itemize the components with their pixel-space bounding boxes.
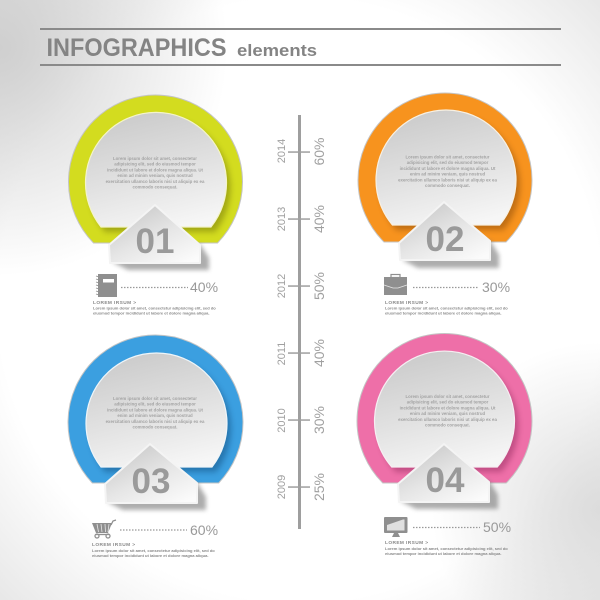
header <box>40 28 561 66</box>
disc text: Lorem ipsum dolor sit amet, consectetur <box>113 156 197 161</box>
caption: LOREM IRSUM > <box>385 540 428 546</box>
timeline: 2010 <box>276 408 288 433</box>
caption: LOREM IRSUM > <box>92 542 135 548</box>
icon: notebook <box>96 274 117 297</box>
disc text: enim ad minim veniam, quis nostrud <box>410 411 485 416</box>
disc text: incididunt ut labore et dolore magna aliqua. Ut <box>400 166 496 171</box>
caption <box>385 540 508 556</box>
disc text: exercitation ullamco laboris nisi ut aliquip ex ea <box>398 417 497 422</box>
timeline: 25% <box>311 473 327 501</box>
disc text: exercitation ullamco laboris nisi ut aliquip ex ea <box>106 419 205 424</box>
disc text: Lorem ipsum dolor sit amet, consectetur <box>406 154 490 160</box>
timeline: 2011 <box>276 342 288 365</box>
disc text: exercitation ullamco laboris nisi ut aliquip ex ea <box>398 177 497 182</box>
caption: Lorem ipsum dolor sit amet, consectetur adipisicing elit, sed do <box>93 306 216 310</box>
disc text <box>106 396 205 430</box>
subtitle: elements <box>237 41 317 60</box>
timeline <box>276 115 327 529</box>
disc text: adipisicing elit, sed do eiusmod tempor <box>407 160 489 165</box>
panel: 04 <box>357 333 532 556</box>
caption: eiusmod tempor incididunt ut labore et dolore magna aliqua. <box>385 551 501 556</box>
caption: Lorem ipsum dolor sit amet, consectetur adipisicing elit, sed do <box>385 306 508 310</box>
ring yellow-green <box>69 95 243 243</box>
progress row: 40% <box>190 279 218 295</box>
disc text: Lorem ipsum dolor sit amet, consectetur <box>113 396 197 401</box>
caption: eiusmod tempor incididunt ut labore et dolore magna aliqua. <box>385 310 501 316</box>
ring blue <box>68 335 243 483</box>
panel: 03 <box>68 335 243 558</box>
number tag <box>398 444 498 509</box>
timeline: 2012 <box>276 274 288 298</box>
inner disc <box>86 353 227 467</box>
disc text: adipisicing elit, sed do eiusmod tempor <box>114 402 196 407</box>
disc text: incididunt ut labore et dolore magna aliqua. Ut <box>400 405 496 410</box>
number tag: 02 <box>426 220 464 259</box>
timeline: 50% <box>311 272 327 300</box>
timeline: 60% <box>311 137 327 166</box>
caption: Lorem ipsum dolor sit amet, consectetur adipisicing elit, sed do <box>385 546 508 551</box>
caption: eiusmod tempor incididunt ut labore et dolore magna aliqua. <box>93 310 209 316</box>
icon: shopping cart <box>92 520 116 538</box>
disc text: adipisicing elit, sed do eiusmod tempor <box>114 162 196 167</box>
panel: 02 <box>358 93 532 316</box>
disc text: adipisicing elit, sed do eiusmod tempor <box>407 400 489 405</box>
number tag: 04 <box>426 461 465 500</box>
progress row: 30% <box>482 279 510 295</box>
icon: monitor <box>384 517 408 537</box>
caption <box>385 300 508 316</box>
disc text: commodo consequat. <box>425 183 470 188</box>
disc text <box>398 154 497 188</box>
timeline: 30% <box>311 406 327 434</box>
number tag <box>105 444 206 510</box>
number tag: 03 <box>132 462 170 501</box>
disc text: commodo consequat. <box>133 424 177 430</box>
inner disc <box>86 112 227 227</box>
progress row: 60% <box>190 522 218 538</box>
progress row <box>120 522 218 538</box>
disc text: incididunt ut labore et dolore magna aliqua. Ut <box>107 407 203 412</box>
disc text: enim ad minim veniam, quis nostrud <box>117 173 193 178</box>
number tag: 01 <box>136 222 174 261</box>
caption <box>92 542 215 558</box>
disc text: commodo consequat. <box>425 422 470 428</box>
timeline: 2014 <box>276 139 288 163</box>
timeline: 2013 <box>276 207 288 231</box>
caption: LOREM IRSUM > <box>385 300 428 306</box>
title: INFOGRAPHICS <box>46 34 226 62</box>
number tag <box>399 202 499 268</box>
progress row <box>413 519 511 535</box>
caption: Lorem ipsum dolor sit amet, consectetur adipisicing elit, sed do <box>92 548 215 553</box>
ring orange <box>358 93 532 242</box>
number tag <box>109 205 209 270</box>
disc text: Lorem ipsum dolor sit amet, consectetur <box>406 394 490 399</box>
timeline: 40% <box>311 205 327 233</box>
caption: LOREM IRSUM > <box>93 300 136 306</box>
disc text <box>106 156 205 190</box>
disc text: enim ad minim veniam, quis nostrud <box>117 413 193 418</box>
disc text: incididunt ut labore et dolore magna aliqua. Ut <box>107 167 203 172</box>
progress row <box>413 279 510 295</box>
progress row: 50% <box>483 519 511 535</box>
progress row <box>121 279 218 295</box>
timeline: 40% <box>311 339 327 367</box>
disc text: commodo consequat. <box>133 184 177 190</box>
icon: briefcase <box>384 274 407 295</box>
caption: eiusmod tempor incididunt ut labore et dolore magna aliqua. <box>92 553 208 558</box>
timeline: 2009 <box>276 475 288 499</box>
caption <box>93 300 216 316</box>
disc text <box>398 394 497 428</box>
inner disc <box>376 110 516 225</box>
ring pink <box>357 333 532 483</box>
panel: 01 <box>69 95 243 316</box>
inner disc <box>374 351 514 467</box>
disc text: exercitation ullamco laboris nisi ut aliquip ex ea <box>106 179 205 184</box>
disc text: enim ad minim veniam, quis nostrud <box>410 172 485 177</box>
